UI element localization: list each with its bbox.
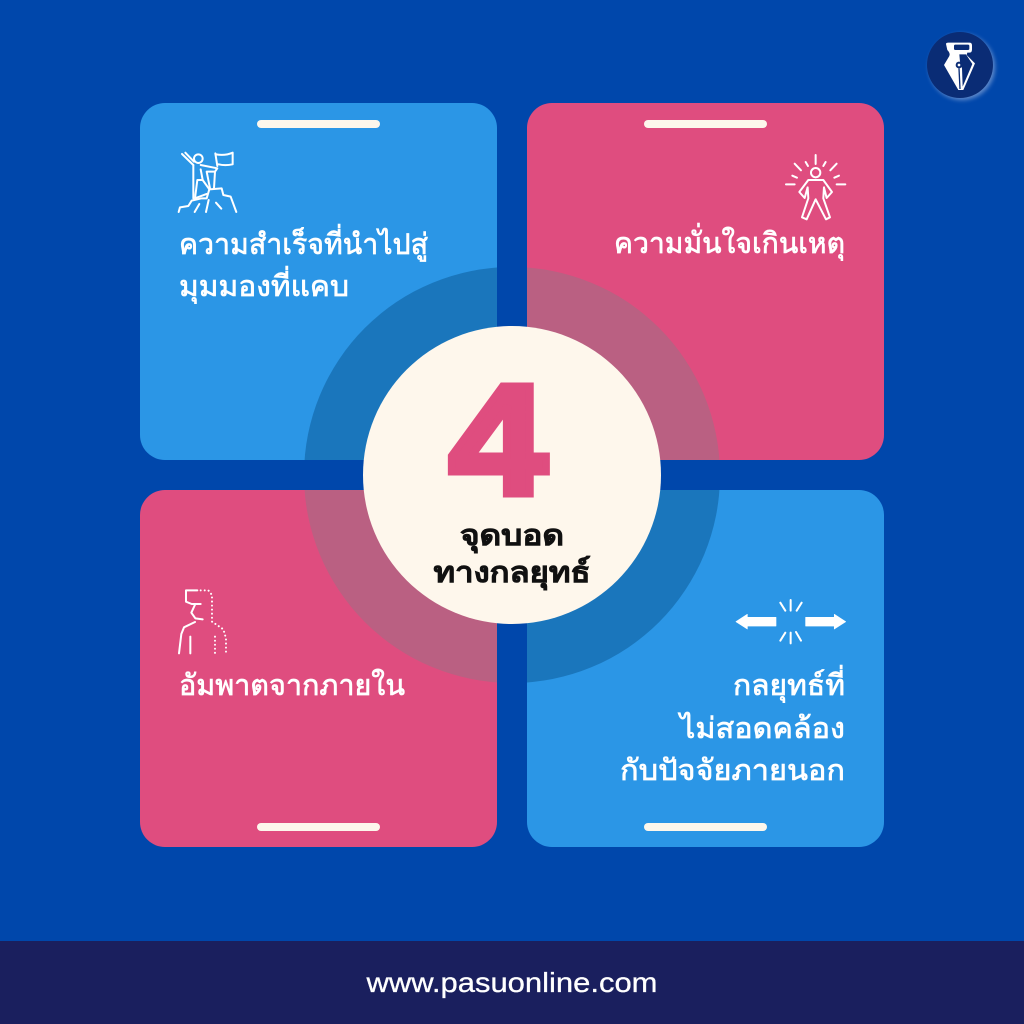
footer bar [0,941,1024,1024]
heading: bottom-right card: กลยุทธ์ที่ [733,665,845,703]
heading: bottom-right card: กับปัจจัยภายนอก [620,755,845,787]
logo: pen nib badge [927,32,995,100]
panel: top-left card [140,103,497,460]
panel: bottom-right card [527,490,884,847]
icon: climber with flag [179,153,236,212]
heading: bottom-right card [620,665,845,787]
centre circle [363,326,661,624]
heading: top-left card: มุมมองที่แคบ [179,266,349,304]
heading: top-right card: ความมั่นใจเกินเหตุ [614,223,845,261]
footer url: www.pasuonline.com [365,967,658,998]
icon: half-dotted person [179,590,226,653]
icon: confident person [786,155,845,219]
heading: top-left card: ความสำเร็จที่นำไปสู่ [179,224,428,262]
heading: top-left card [179,224,428,304]
heading: bottom-right card: ไม่สอดคล้อง [678,711,845,745]
heading: bottom-left card: อัมพาตจากภายใน [179,668,405,702]
panel: top-right card [527,103,884,460]
centre title: จุดบอด [460,520,564,553]
ring behind centre circle [304,267,720,683]
centre title [434,520,590,590]
big number 4: 4 [449,353,547,528]
panel: bottom-left card [140,490,497,847]
centre title: ทางกลยุทธ์ [434,555,590,590]
icon: arrows pulling apart [736,600,846,643]
